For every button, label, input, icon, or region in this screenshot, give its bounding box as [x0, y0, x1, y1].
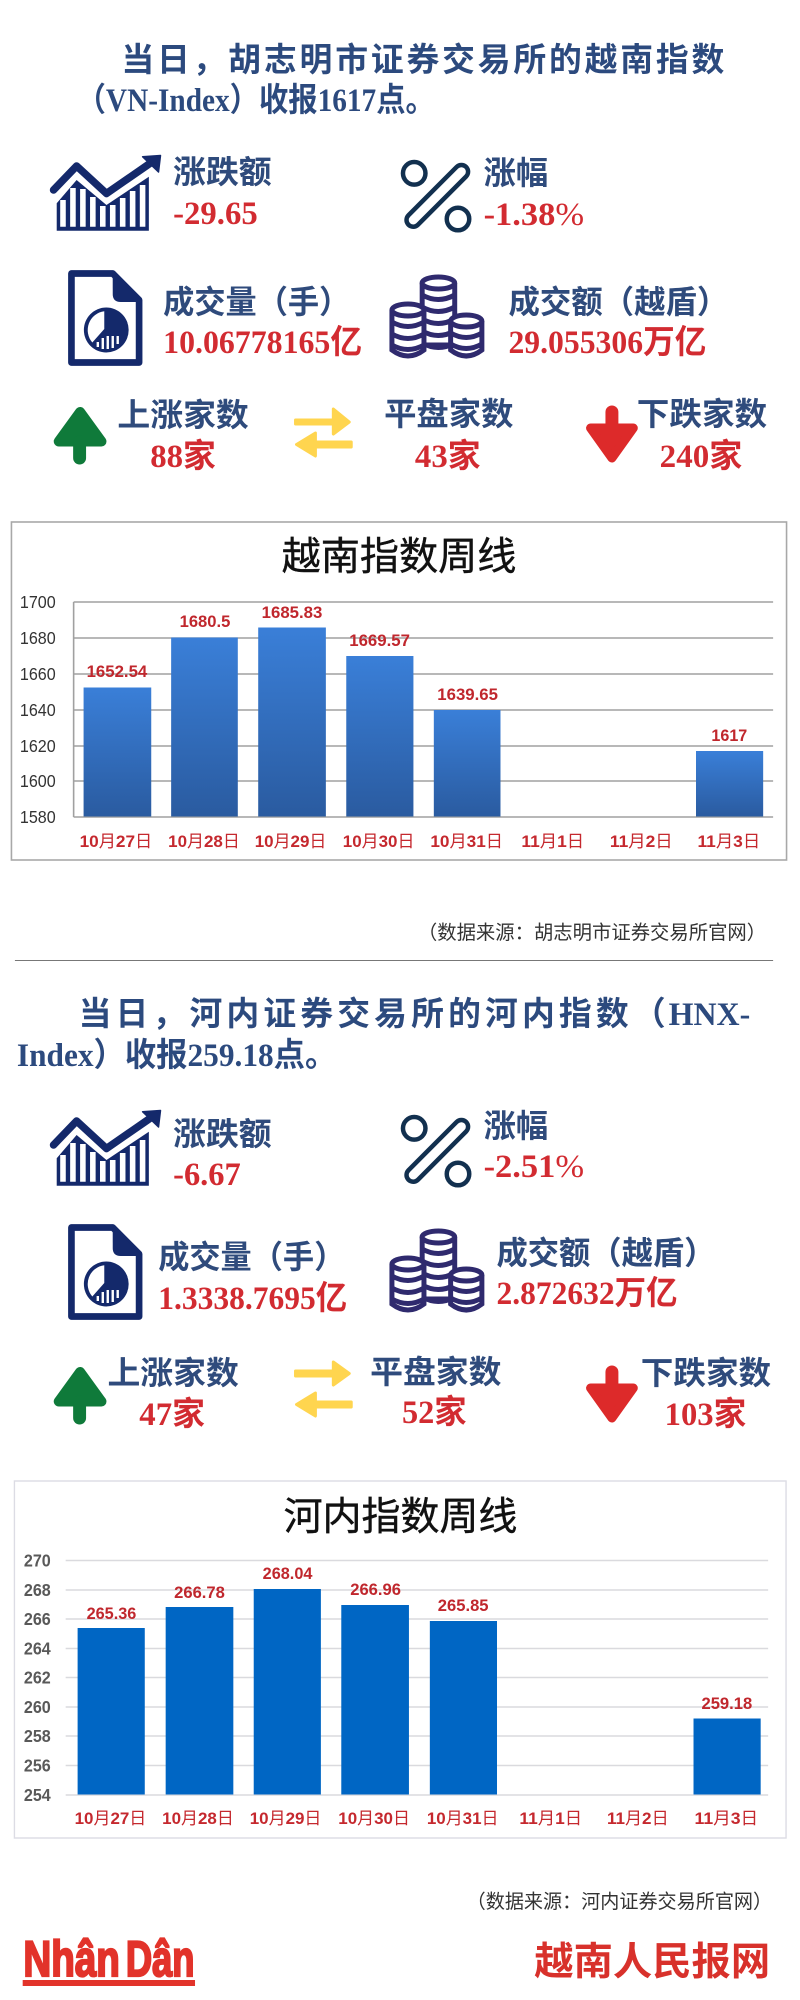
heading: VN-Index close: 当日，胡志明市证券交易所的越南指数 [121, 42, 724, 79]
y axis labels [24, 1550, 51, 1805]
stat: change percent [484, 155, 584, 233]
data labels: 265.36 [87, 1604, 136, 1623]
stat: turnover value [497, 1235, 715, 1312]
data labels: 1652.54 [87, 662, 148, 681]
stat: decliners: 103家 [665, 1396, 746, 1433]
icon: coin stacks [392, 1231, 482, 1310]
stat: advancers [107, 1355, 239, 1433]
chart title: 越南指数周线 [282, 536, 516, 579]
data labels: 1685.83 [262, 603, 322, 622]
data labels [87, 1564, 752, 1713]
stat: unchanged [384, 396, 513, 475]
source note 2: （数据来源：河内证券交易所官网） [467, 1891, 772, 1913]
stat: change amount: 涨跌额 [173, 154, 272, 190]
stat: change percent [484, 1108, 584, 1185]
icon: yellow swap arrows [296, 1362, 351, 1416]
icon: yellow swap arrows [296, 409, 351, 456]
stat: turnover value: 2.872632万亿 [497, 1275, 678, 1312]
y axis labels: 256 [24, 1755, 51, 1776]
x axis labels: 10月28日 [162, 1809, 234, 1828]
y axis labels: 258 [24, 1726, 51, 1746]
stat: decliners [641, 1355, 771, 1433]
data labels: 266.78 [174, 1583, 225, 1602]
stat: volume: 1.3338.7695亿 [158, 1280, 347, 1317]
y axis labels: 254 [24, 1785, 51, 1805]
x axis labels: 10月29日 [255, 832, 326, 851]
chart title: 河内指数周线 [284, 1496, 517, 1539]
heading: HNX-Index close: Index）收报259.18点。 [17, 1037, 336, 1074]
bars [78, 1589, 761, 1794]
stat: change amount: 涨跌额 [173, 1116, 272, 1152]
panel: HNX-Index summary [17, 996, 771, 1433]
logo: Nhan Dan: Nhân [23, 1931, 120, 1987]
x axis labels: 11月2日 [607, 1809, 669, 1828]
stat: change amount [173, 154, 272, 232]
stat: advancers: 88家 [150, 438, 216, 475]
stat: unchanged [370, 1354, 502, 1431]
stat: change amount: -29.65 [173, 196, 258, 232]
data labels: 1669.57 [349, 631, 410, 650]
stat: volume [163, 284, 362, 361]
footer: Vietnamese People's Daily site name: 越南人民报网 [534, 1941, 770, 1984]
data labels: 266.96 [350, 1580, 401, 1599]
data labels [87, 603, 747, 745]
x axis labels: 11月3日 [695, 1809, 758, 1828]
x axis labels: 10月30日 [338, 1809, 410, 1828]
y axis labels: 1620 [20, 736, 56, 756]
icon: percent [403, 1117, 469, 1185]
icon: percent [403, 162, 469, 230]
y axis labels: 268 [24, 1580, 51, 1600]
panel: HNX-Index weekly chart [14, 1481, 786, 1838]
y axis labels: 266 [24, 1609, 51, 1629]
stat: turnover value: 成交额（越盾） [508, 284, 728, 320]
x axis labels: 10月28日 [168, 832, 240, 851]
x axis labels: 10月27日 [75, 1809, 146, 1828]
x axis labels: 10月30日 [343, 832, 414, 851]
icon: rising chart [54, 1110, 160, 1186]
x axis labels: 11月3日 [697, 832, 760, 851]
y axis labels: 260 [24, 1697, 51, 1717]
stat: volume [158, 1239, 347, 1317]
stat: unchanged: 52家 [402, 1394, 467, 1431]
panel: VN-Index weekly chart [11, 522, 787, 860]
y axis labels [20, 592, 56, 827]
icon: down arrow [591, 412, 633, 458]
stat: volume: 成交量（手） [158, 1239, 345, 1275]
heading: VN-Index close [77, 42, 724, 119]
stat: change amount: -6.67 [173, 1157, 241, 1193]
data labels: 1617 [711, 726, 747, 745]
stat: unchanged: 43家 [415, 438, 481, 475]
stat: change amount [173, 1116, 272, 1193]
x axis labels: 10月31日 [430, 832, 503, 851]
x axis labels: 11月2日 [610, 832, 673, 851]
heading: VN-Index close: （VN-Index）收报1617点。 [77, 82, 435, 119]
x axis labels [75, 1809, 758, 1828]
x axis labels: 11月1日 [521, 832, 584, 851]
stat: advancers [117, 397, 249, 475]
stat: unchanged: 平盘家数 [384, 396, 513, 432]
y axis labels: 264 [24, 1638, 51, 1659]
stat: decliners: 240家 [660, 438, 742, 475]
stat: unchanged: 平盘家数 [370, 1354, 502, 1390]
icon: document with pie chart [71, 273, 142, 362]
icon: rising chart [54, 156, 160, 231]
stat: change percent: 涨幅 [484, 1108, 548, 1144]
stat: decliners [637, 396, 767, 475]
bars [84, 628, 763, 816]
stat: advancers: 47家 [139, 1396, 205, 1433]
data labels: 259.18 [701, 1694, 752, 1713]
stat: decliners: 下跌家数 [637, 396, 767, 432]
data labels: 1639.65 [437, 685, 498, 704]
stat: turnover value: 29.055306万亿 [508, 324, 706, 361]
icon: up arrow [59, 1372, 101, 1418]
stat: decliners: 下跌家数 [641, 1355, 771, 1391]
data labels: 265.85 [438, 1596, 489, 1615]
y axis labels: 1640 [20, 700, 56, 720]
y axis labels: 1600 [20, 771, 56, 791]
stat: volume: 10.06778165亿 [163, 324, 362, 361]
y axis labels: 1580 [20, 807, 56, 827]
y axis labels: 1680 [20, 628, 56, 648]
icon: up arrow [59, 412, 101, 458]
stat: change percent: -1.38% [484, 197, 584, 233]
stat: turnover value: 成交额（越盾） [497, 1235, 715, 1271]
y axis labels: 1700 [20, 592, 56, 612]
icon: document with pie chart [71, 1227, 142, 1316]
y axis labels: 262 [24, 1667, 51, 1688]
x axis labels: 11月1日 [519, 1809, 582, 1828]
logo: Nhan Dan: Dân [126, 1931, 195, 1987]
heading: HNX-Index close: HNX- [669, 997, 750, 1033]
heading: HNX-Index close: 当日，河内证券交易所的河内指数（ [79, 996, 666, 1033]
icon: coin stacks [392, 277, 482, 356]
data labels: 1680.5 [180, 612, 230, 631]
heading: HNX-Index close [17, 996, 750, 1074]
x axis labels: 10月31日 [427, 1809, 498, 1828]
x axis labels: 10月29日 [250, 1809, 321, 1828]
data labels: 268.04 [263, 1564, 313, 1583]
x axis labels [80, 832, 760, 851]
stat: advancers: 上涨家数 [107, 1355, 239, 1391]
stat: turnover value [508, 284, 728, 361]
stat: advancers: 上涨家数 [117, 397, 249, 433]
icon: down arrow [591, 1372, 633, 1418]
stat: change percent: 涨幅 [484, 155, 548, 191]
y axis labels: 1660 [20, 664, 56, 684]
stat: change percent: -2.51% [484, 1149, 584, 1185]
stat: volume: 成交量（手） [163, 284, 350, 320]
panel: VN-Index summary [54, 42, 767, 475]
y axis labels: 270 [24, 1550, 51, 1571]
x axis labels: 10月27日 [80, 832, 152, 851]
source note 1: （数据来源：胡志明市证券交易所官网） [418, 922, 766, 944]
